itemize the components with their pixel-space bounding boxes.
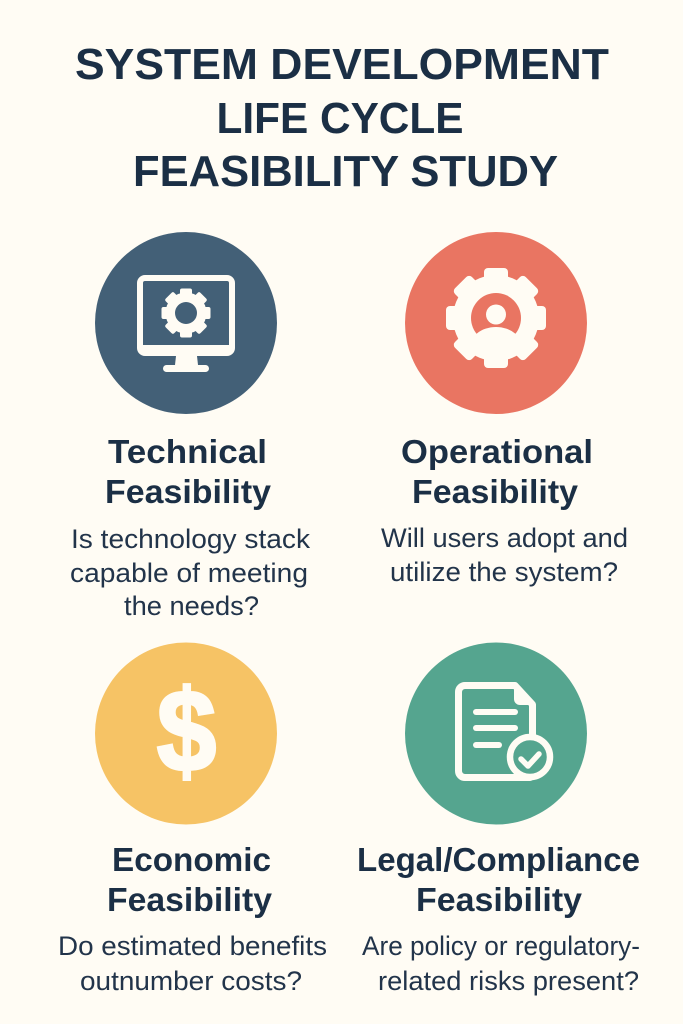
text: economic question: Do estimated benefits [58,931,327,961]
text: technical question [70,524,311,621]
heading: technical feasibility: Feasibility [105,473,272,510]
heading: legal/compliance feasibility [357,841,640,918]
heading: legal/compliance feasibility: Feasibility [416,881,583,918]
text: technical question: Is technology stack [71,524,311,554]
icon: dollar sign: $ [157,666,216,796]
icon: gear with user [405,232,587,414]
text: operational question: utilize the system? [390,557,618,587]
text: operational question [381,523,628,587]
icon: dollar sign [95,642,277,824]
panel: legal/compliance feasibility [357,642,640,996]
title: LIFE CYCLE [216,94,464,143]
heading: operational feasibility [401,433,593,510]
text: economic question [58,931,327,996]
text: legal question: related risks present? [378,966,639,996]
heading: economic feasibility: Feasibility [107,881,273,918]
heading: technical feasibility [105,433,272,510]
text: technical question: capable of meeting [70,558,308,588]
panel: economic feasibility [58,642,327,996]
title [75,40,609,196]
panel: technical feasibility [70,232,311,621]
panel: operational feasibility [381,232,628,587]
heading: technical feasibility: Technical [108,433,267,470]
title: SYSTEM DEVELOPMENT [75,40,609,89]
text: economic question: outnumber costs? [80,966,302,996]
heading: economic feasibility: Economic [112,841,271,878]
icon: monitor with gear [95,232,277,414]
text: legal question [362,931,640,996]
heading: economic feasibility [107,841,273,918]
icon: document with check [405,642,587,824]
text: operational question: Will users adopt and [381,523,628,553]
title: FEASIBILITY STUDY [133,147,558,196]
text: technical question: the needs? [124,591,259,621]
heading: legal/compliance feasibility: Legal/Compliance [357,841,640,878]
text: legal question: Are policy or regulatory- [362,931,640,961]
heading: operational feasibility: Operational [401,433,593,470]
heading: operational feasibility: Feasibility [412,473,579,510]
